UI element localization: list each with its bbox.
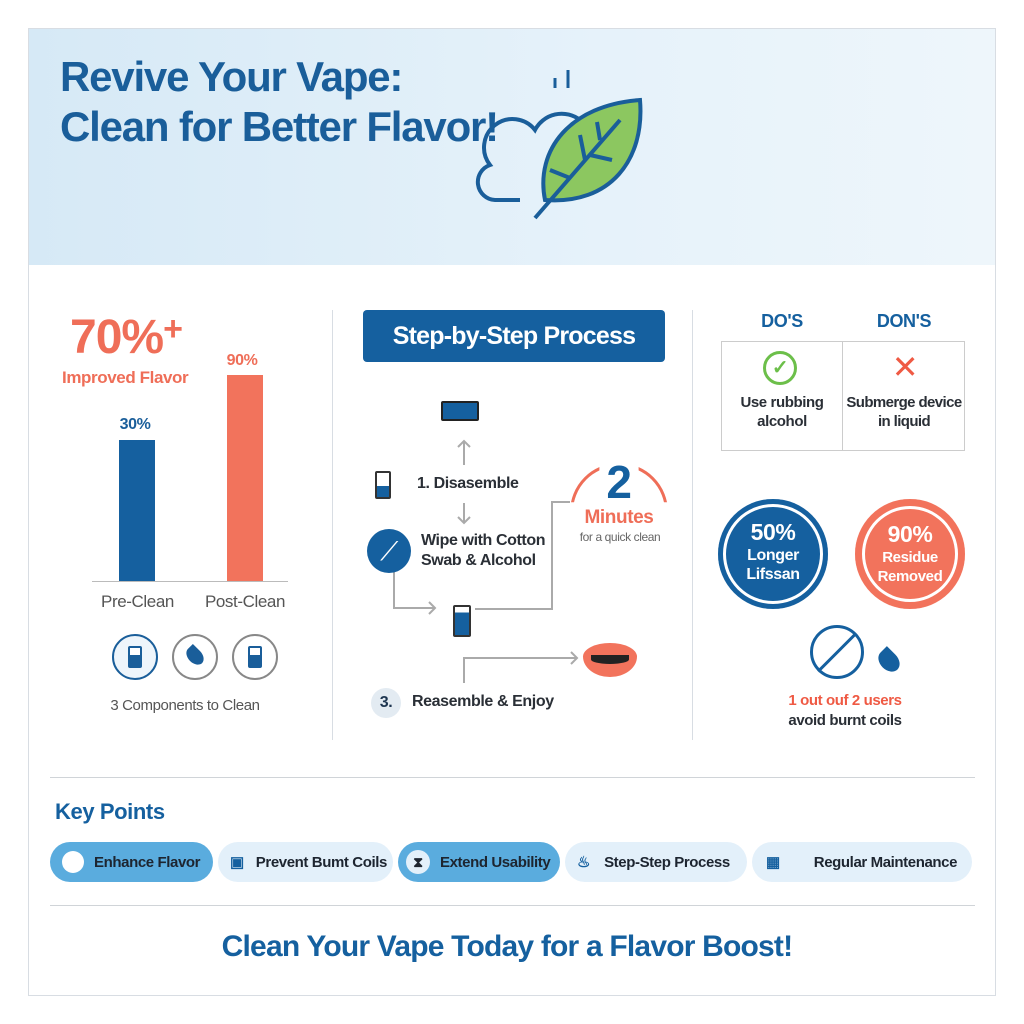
do's don'ts table: ✕ [892, 349, 918, 385]
heading [363, 310, 665, 362]
stat circle 90%: Removed [878, 568, 942, 585]
label components: 3 Components to Clean [110, 697, 260, 714]
dividers [332, 310, 333, 740]
footer call to action: Clean Your Vape Today for a Flavor Boost! [222, 930, 792, 963]
step 3: 3. [380, 694, 392, 711]
stat circle 50%: Lifssan [746, 566, 800, 583]
icon: swab [367, 529, 411, 573]
do's don'ts table: DO'S [761, 311, 803, 331]
callout: 2 minutes: Minutes [584, 507, 653, 528]
pill: extend usability: Extend Usability [440, 854, 550, 870]
do's don'ts table: Use rubbing [740, 394, 824, 411]
panel: dos and donts [718, 311, 965, 729]
stat circle 50% [718, 499, 828, 609]
step 1: 1. Disasemble [417, 475, 519, 492]
arrows [393, 440, 578, 683]
bar chart [92, 352, 288, 611]
pill: regular maintenance: ▦ [766, 854, 780, 871]
icon: battery mid [453, 605, 471, 637]
callout: 2 minutes [571, 456, 667, 544]
pill: prevent burnt coils: Prevent Bumt Coils [256, 854, 387, 870]
pill: regular maintenance: Regular Maintenance [814, 854, 957, 870]
icon: battery top [441, 401, 479, 421]
step 2 [421, 532, 545, 569]
icon: no burnt coil [810, 625, 900, 679]
stat text: avoid burnt coils [788, 712, 902, 729]
do's don'ts table: DON'S [877, 311, 931, 331]
step 3: Reasemble & Enjoy [412, 693, 554, 710]
callout: 2 minutes: 2 [606, 456, 632, 508]
pill: prevent burnt coils: ▣ [230, 854, 244, 871]
icon: lips [583, 643, 637, 677]
stat circle 90%: 90% [888, 521, 932, 547]
stat 70%: 70%+ [70, 310, 182, 364]
pill: extend usability [398, 842, 560, 882]
icons: three components [112, 634, 278, 680]
title: Clean for Better Flavor! [60, 103, 498, 150]
heading: Step-by-Step Process [393, 322, 635, 350]
do's don'ts table: alcohol [757, 413, 807, 430]
pill: step-step process: ♨ [577, 854, 590, 871]
stat circle 90%: Residue [882, 549, 938, 566]
pill: prevent burnt coils [218, 842, 393, 882]
step 2: Swab & Alcohol [421, 552, 536, 569]
panel: step-by-step [363, 310, 667, 718]
pill: step-step process: Step-Step Process [604, 854, 730, 870]
stat circle 50%: Longer [747, 547, 799, 564]
label improved flavor: Improved Flavor [62, 368, 188, 387]
pill: extend usability: ⧗ [413, 854, 423, 870]
icon: swab: ⟋ [380, 536, 398, 566]
do's don'ts table: Submerge device [846, 394, 962, 411]
heading key points: Key Points [55, 799, 165, 824]
pill: enhance flavor [50, 842, 213, 882]
pill: step-step process [565, 842, 747, 882]
title: Revive Your Vape: [60, 53, 402, 100]
panel: flavor stats [62, 310, 288, 714]
title [60, 53, 498, 150]
stat circle 50%: 50% [751, 519, 795, 545]
do's don'ts table: ✓ [772, 357, 788, 379]
do's don'ts table: in liquid [878, 413, 930, 430]
stat text: 1 out ouf 2 users [788, 692, 902, 709]
bar chart: 30% [120, 416, 150, 433]
bar chart: Pre-Clean [101, 592, 174, 611]
bar chart: Post-Clean [205, 592, 285, 611]
callout: 2 minutes: for a quick clean [580, 530, 660, 544]
stat text [788, 692, 902, 729]
step 2: Wipe with Cotton [421, 532, 545, 549]
bar chart: 90% [227, 352, 257, 369]
stat circle 90% [855, 499, 965, 609]
step 3 [371, 688, 554, 718]
header band [29, 29, 995, 265]
do's don'ts table [721, 311, 965, 451]
icon: cloud and leaf [476, 70, 642, 220]
icon: small battery [375, 471, 391, 499]
pill: regular maintenance [752, 842, 972, 882]
pill: enhance flavor: Enhance Flavor [94, 854, 200, 870]
